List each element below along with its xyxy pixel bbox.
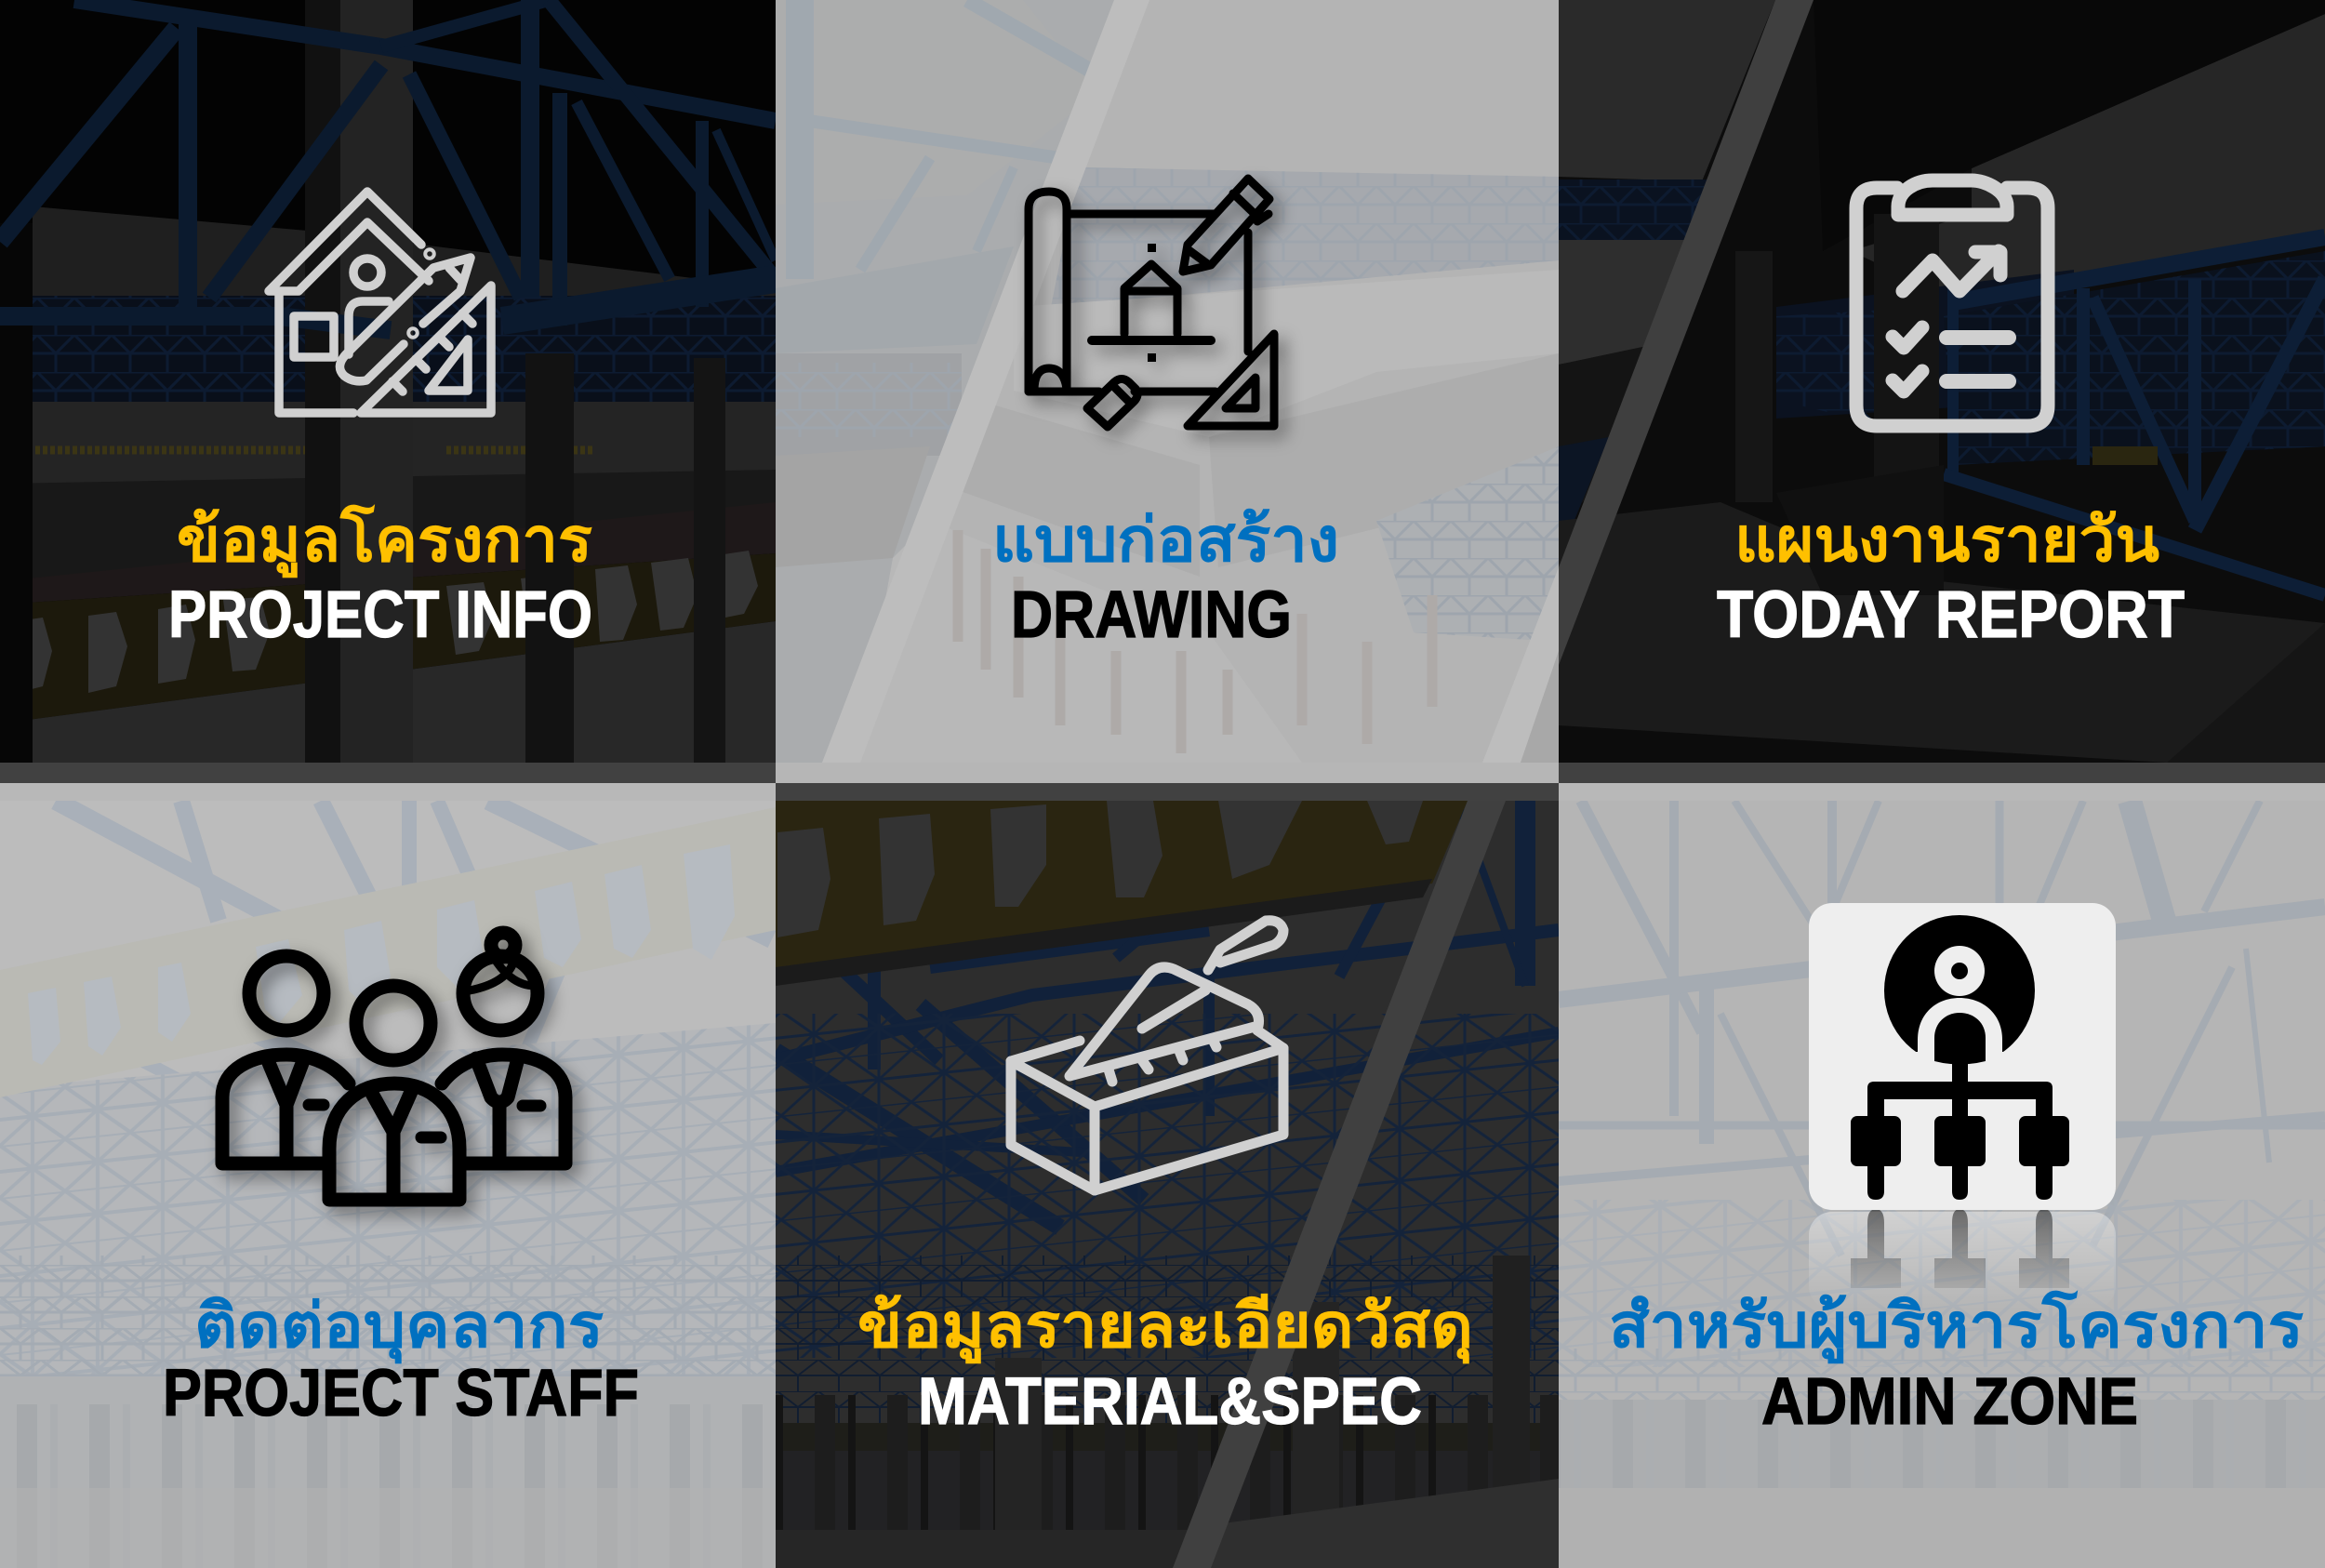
heading: drawing xyxy=(992,505,1339,652)
heading: material and spec: MATERIAL&SPEC xyxy=(918,1365,1422,1439)
icon: reflection of admin badge xyxy=(1809,1209,2116,1309)
panel: project staff xyxy=(0,801,776,1568)
heading: admin zone: ADMIN ZONE xyxy=(1761,1365,2138,1439)
heading: project staff xyxy=(163,1291,639,1430)
heading: project staff: ติดต่อบุคลากร xyxy=(194,1291,604,1363)
heading: project info xyxy=(168,505,592,652)
heading: today report xyxy=(1717,505,2185,652)
heading: today report: แผนงานรายวัน xyxy=(1734,505,2159,574)
heading: material and spec xyxy=(857,1291,1473,1439)
heading: project info: ข้อมูลโครงการ xyxy=(177,505,592,578)
icon: clipboard with chart and checklist xyxy=(1856,180,2048,426)
heading: project info: PROJECT INFO xyxy=(168,578,592,652)
heading: material and spec: ข้อมูลรายละเอียดวัสดุ xyxy=(857,1291,1473,1363)
heading: drawing: DRAWING xyxy=(1011,578,1292,652)
heading: today report: TODAY REPORT xyxy=(1717,578,2185,652)
panel: material and spec xyxy=(776,801,1559,1568)
icon: blueprint with pencil and set square xyxy=(1029,179,1274,427)
band: row separators xyxy=(0,763,2325,801)
panel: project info xyxy=(0,0,777,767)
heading: drawing: แบบก่อสร้าง xyxy=(992,505,1339,574)
panel: today report xyxy=(1559,0,2325,763)
heading: project staff: PROJECT STAFF xyxy=(163,1357,639,1430)
panel: admin zone xyxy=(1559,801,2325,1568)
panel: drawing xyxy=(776,0,1559,763)
icon: admin organisation chart xyxy=(1809,903,2116,1210)
heading: admin zone xyxy=(1609,1291,2304,1439)
icon: project staff group xyxy=(222,933,565,1200)
icon: house plan with pencil and ruler xyxy=(269,192,491,413)
heading: admin zone: สำหรับผู้บริหารโครงการ xyxy=(1609,1291,2304,1363)
icon: brick and trowel xyxy=(1011,921,1283,1190)
